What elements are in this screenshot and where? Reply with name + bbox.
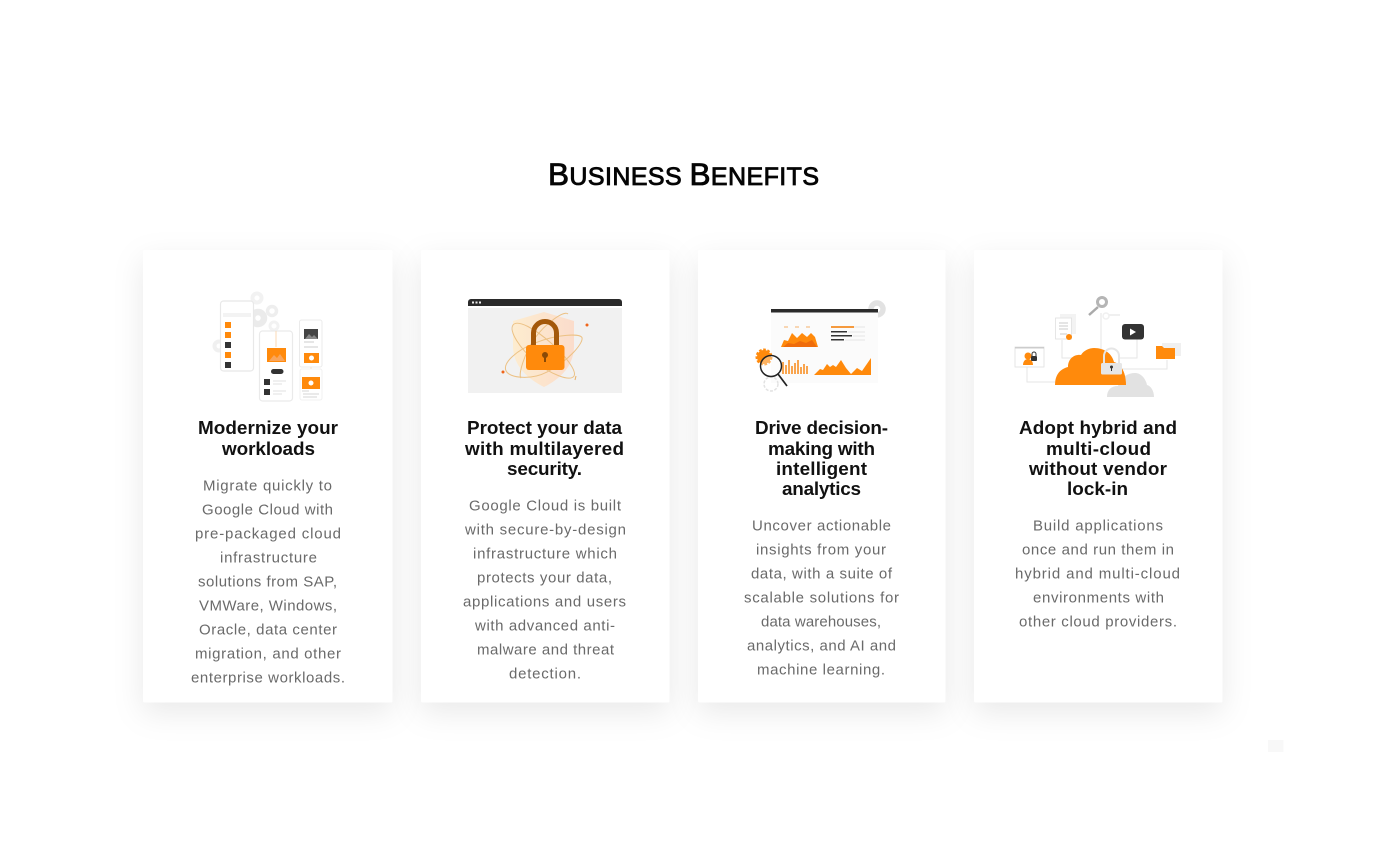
- icon: browser window with padlock: [468, 299, 622, 393]
- panel: modernize your workloads: [143, 250, 392, 702]
- text block: Oracle, data center: [199, 622, 337, 639]
- text block: Build applications: [1033, 518, 1163, 535]
- text block: insights from your: [756, 542, 886, 559]
- heading: analytics: [782, 479, 861, 500]
- text block: with advanced anti-: [474, 618, 615, 635]
- text block: [191, 478, 345, 687]
- text block: infrastructure: [220, 550, 317, 567]
- icon: analytics dashboard: [757, 303, 883, 391]
- heading: [755, 418, 888, 500]
- text block: [744, 518, 899, 679]
- text block: infrastructure which: [473, 546, 617, 563]
- heading: lock-in: [1067, 479, 1128, 500]
- panel: decision-making analytics: [698, 250, 946, 702]
- heading: Modernize your: [198, 418, 339, 439]
- text block: applications and users: [463, 594, 626, 611]
- text block: data warehouses,: [761, 614, 881, 631]
- text block: [1015, 518, 1180, 631]
- text block: Google Cloud with: [202, 502, 333, 519]
- text block: scalable solutions for: [744, 590, 899, 607]
- text block: analytics, and AI and: [747, 638, 896, 655]
- heading: making with: [768, 439, 875, 460]
- heading: Adopt hybrid and: [1019, 418, 1177, 439]
- text block: Migrate quickly to: [203, 478, 332, 495]
- heading: with multilayered: [464, 439, 624, 460]
- heading: security.: [507, 459, 582, 480]
- text block: malware and threat: [477, 642, 615, 659]
- panel: hybrid and multi-cloud: [974, 250, 1222, 702]
- heading: intelligent: [776, 459, 868, 480]
- text block: other cloud providers.: [1019, 614, 1177, 631]
- text block: protects your data,: [477, 570, 612, 587]
- text block: data, with a suite of: [751, 566, 893, 583]
- title: BUSINESS BENEFITS: [548, 156, 819, 192]
- text block: once and run them in: [1022, 542, 1174, 559]
- heading: multi-cloud: [1046, 439, 1151, 460]
- heading: [1019, 418, 1177, 500]
- text block: migration, and other: [195, 646, 341, 663]
- text block: Google Cloud is built: [469, 498, 622, 515]
- heading: workloads: [221, 439, 315, 460]
- text block: environments with: [1033, 590, 1164, 607]
- heading: [464, 418, 624, 480]
- text block: Uncover actionable: [752, 518, 891, 535]
- text block: hybrid and multi-cloud: [1015, 566, 1180, 583]
- text block: pre-packaged cloud: [195, 526, 341, 543]
- faint square mark: [1268, 740, 1284, 752]
- heading: without vendor: [1028, 459, 1168, 480]
- text block: VMWare, Windows,: [199, 598, 337, 615]
- panel: protect your data: [421, 250, 670, 702]
- text block: machine learning.: [757, 662, 885, 679]
- icon: cloud connections: [1015, 298, 1181, 397]
- text block: solutions from SAP,: [198, 574, 337, 591]
- text block: enterprise workloads.: [191, 670, 345, 687]
- text block: [463, 498, 626, 683]
- text block: detection.: [509, 666, 581, 683]
- icon: mobile app screens: [214, 294, 322, 401]
- heading: Drive decision-: [755, 418, 888, 439]
- heading: Protect your data: [467, 418, 622, 439]
- text block: with secure-by-design: [464, 522, 626, 539]
- heading: [198, 418, 339, 460]
